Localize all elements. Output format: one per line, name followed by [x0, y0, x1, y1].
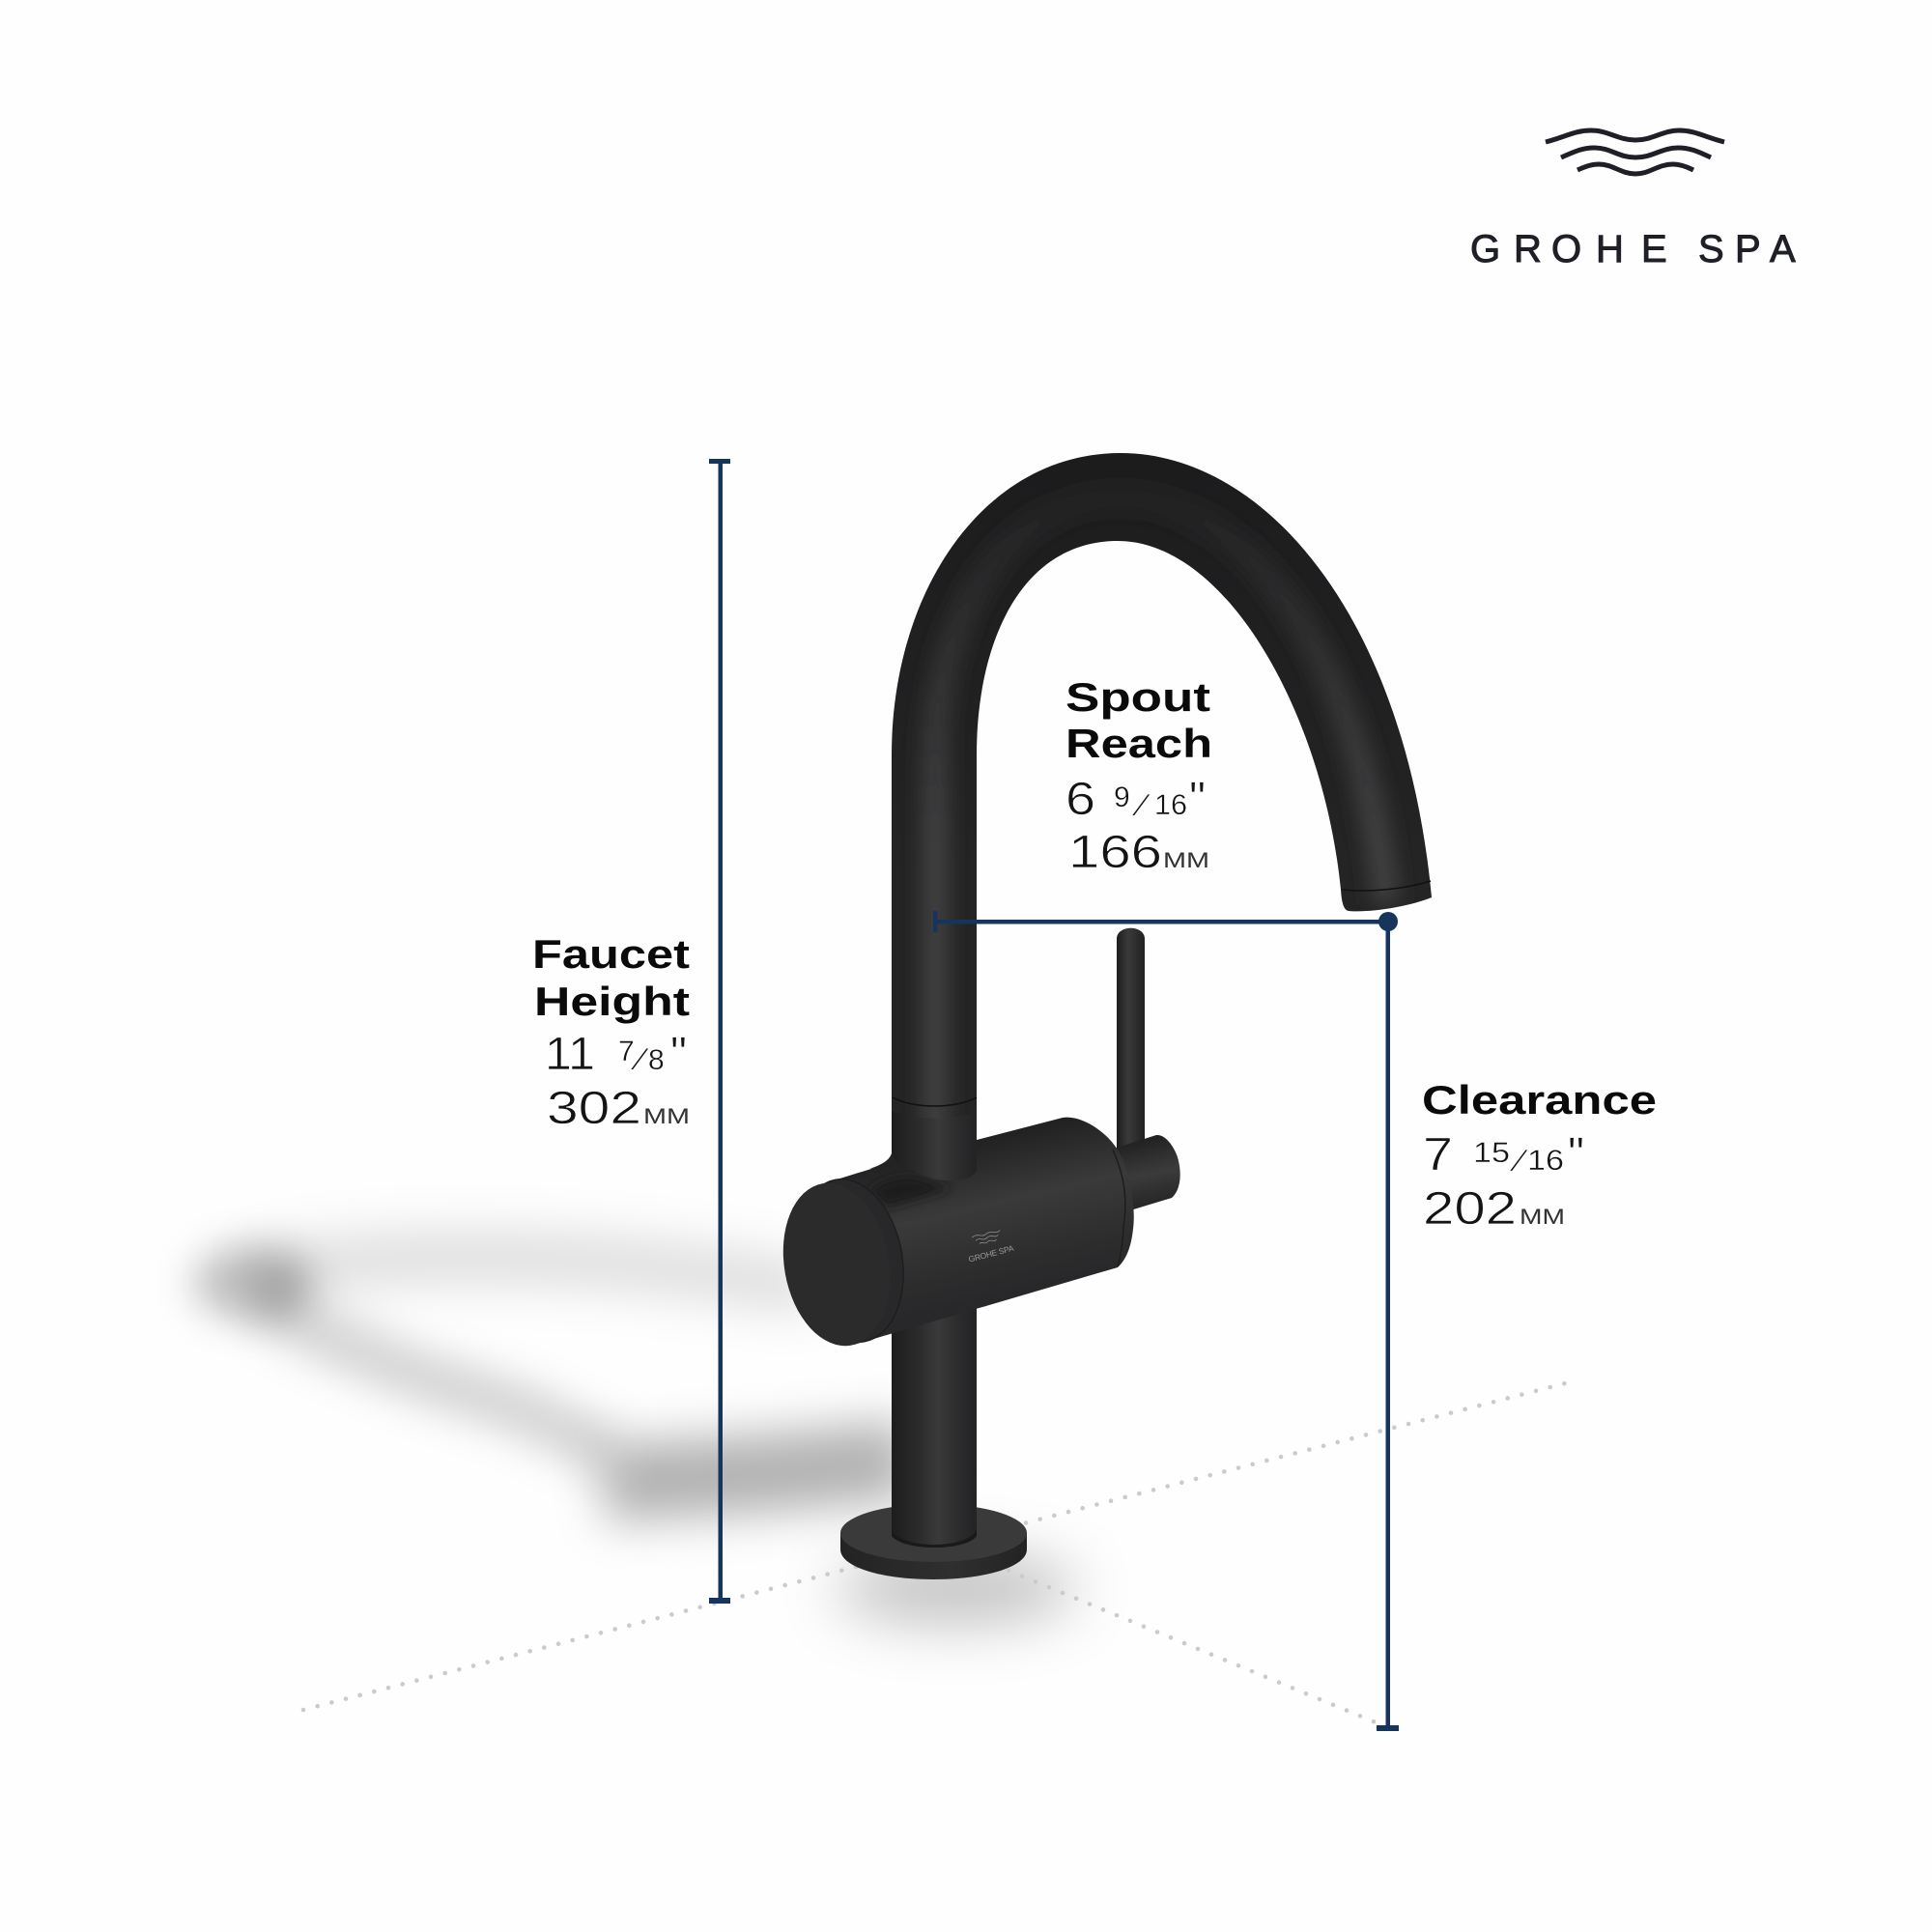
label: clearance: MM	[1520, 1205, 1565, 1229]
dotted floor line: left to right	[303, 1380, 1577, 1710]
brand logo	[1470, 130, 1796, 270]
label: spout reach: 166	[1068, 827, 1162, 878]
handle end cap face	[771, 1175, 902, 1354]
knob	[1111, 1135, 1180, 1210]
spout reach dimension line	[933, 911, 1398, 932]
engraved logo on handle	[963, 1227, 1015, 1264]
label: faucet height: Faucet	[532, 931, 690, 977]
ground shadow under base	[836, 1554, 1077, 1624]
label: spout reach: Spout	[1065, 674, 1210, 720]
faucet base plate	[840, 1504, 1027, 1579]
label: spout reach	[1065, 674, 1212, 878]
label: faucet height: 302	[547, 1083, 641, 1134]
lower column	[892, 1294, 977, 1548]
wordmark: GROHE SPA	[1470, 228, 1796, 270]
spout and column	[892, 453, 1432, 1169]
label: clearance: /	[1507, 1144, 1530, 1178]
label: clearance: 202	[1423, 1183, 1517, 1235]
label: clearance: 16	[1527, 1145, 1564, 1177]
label: faucet height	[532, 931, 690, 1134]
label: faucet height: 11	[545, 1029, 595, 1080]
faucet	[771, 453, 1432, 1579]
label: spout reach: 9	[1114, 781, 1130, 813]
label: clearance	[1422, 1077, 1657, 1235]
engraved logo on handle: GROHE SPA	[968, 1243, 1015, 1264]
label: spout reach: 6	[1065, 774, 1095, 825]
label: faucet height: "	[670, 1029, 687, 1080]
label: spout reach: /	[1129, 788, 1152, 822]
control lever	[1117, 928, 1145, 1154]
cast shadow of faucet	[193, 1246, 908, 1483]
label: faucet height: 7	[618, 1036, 635, 1067]
handle body	[821, 1111, 1134, 1345]
label: clearance: Clearance	[1422, 1077, 1657, 1122]
label: clearance: 15	[1473, 1137, 1510, 1169]
icon: water waves	[1546, 130, 1724, 174]
handle end cap ring	[784, 1171, 916, 1350]
clearance dimension line	[1377, 922, 1399, 1731]
label: faucet height: Height	[534, 979, 690, 1024]
label: spout reach: 16	[1154, 789, 1187, 821]
dotted floor line: base to clearance	[995, 1565, 1376, 1722]
label: faucet height: MM	[643, 1104, 690, 1128]
label: clearance: 7	[1423, 1129, 1453, 1180]
label: faucet height: /	[628, 1042, 651, 1076]
label: faucet height: 8	[648, 1044, 665, 1076]
faucet height dimension line	[709, 459, 730, 1604]
label: spout reach: Reach	[1065, 721, 1212, 766]
label: spout reach: MM	[1163, 848, 1209, 872]
label: spout reach: "	[1189, 774, 1206, 825]
label: clearance: "	[1568, 1129, 1584, 1180]
